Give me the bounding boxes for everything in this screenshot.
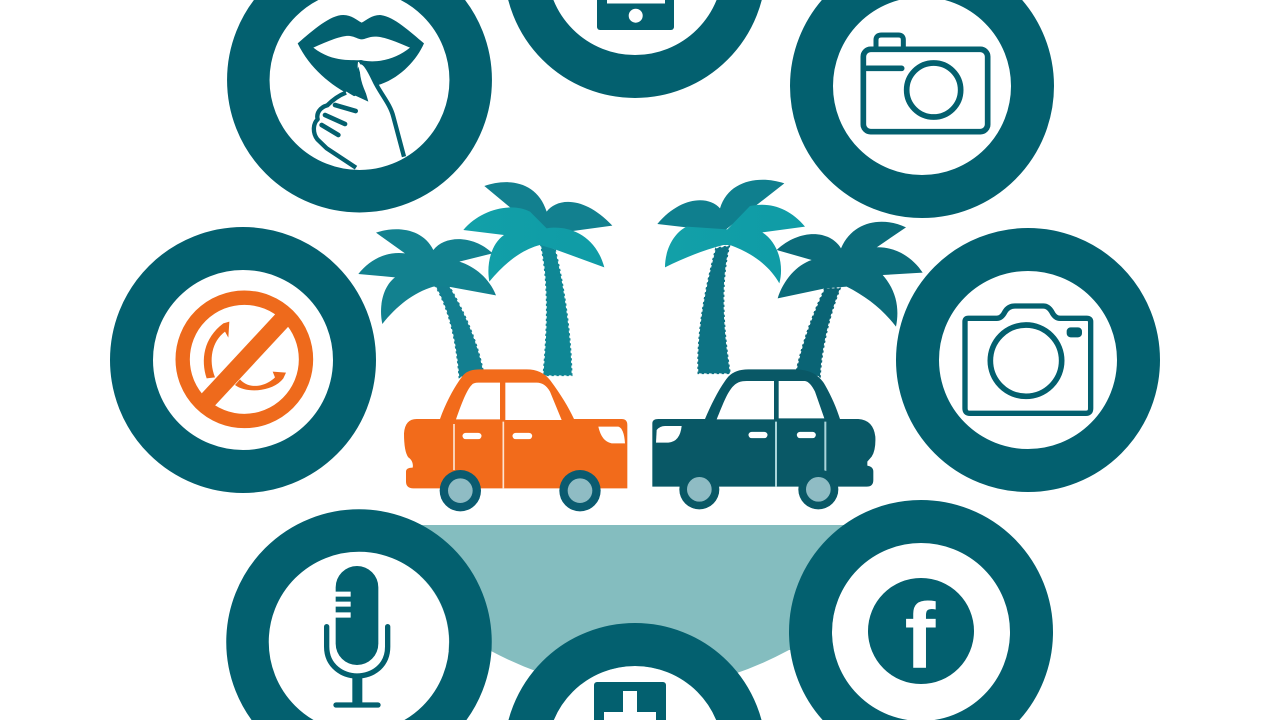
icon: microphone	[327, 566, 388, 708]
tall palm lower fronds	[463, 207, 604, 282]
tall palm trunk	[541, 244, 572, 375]
badge: digital camera	[918, 250, 1138, 470]
badge: medical kit	[526, 644, 744, 720]
palm pair: left	[358, 182, 612, 377]
wheels	[440, 470, 601, 511]
palm pair: right	[657, 180, 923, 377]
badge: Facebook	[810, 522, 1032, 720]
door lines	[454, 422, 503, 488]
door handles	[466, 426, 529, 445]
teal ground shape	[420, 525, 850, 690]
dark teal car	[652, 369, 875, 509]
windows	[717, 381, 824, 419]
badge: compact camera	[812, 0, 1032, 196]
icon: lips with finger	[298, 15, 424, 172]
icon: compact camera	[863, 35, 988, 132]
left palm crown	[358, 229, 496, 324]
door lines	[776, 422, 825, 487]
icon: medical cross	[594, 682, 666, 720]
icon: Facebook logo	[868, 578, 974, 688]
orange car	[404, 369, 627, 511]
windows	[456, 383, 562, 420]
headlight	[598, 427, 625, 443]
wheels	[679, 469, 838, 509]
tall palm trunk	[698, 246, 730, 373]
right palm crown	[777, 222, 923, 327]
left palm trunk	[435, 285, 483, 377]
icon: digital camera	[965, 306, 1091, 413]
right palm trunk	[797, 288, 840, 377]
tall palm upper fronds	[484, 182, 612, 235]
tall palm lower fronds	[665, 205, 805, 283]
icon: crossed-out phone	[183, 298, 306, 421]
badge: no phone calls	[132, 248, 354, 472]
icon: Facebook logo: f	[905, 584, 937, 688]
headlight	[656, 426, 682, 443]
badge: silence, lips and finger	[248, 0, 471, 191]
car body	[652, 369, 875, 487]
badge: microphone	[248, 530, 470, 720]
car body	[404, 369, 627, 488]
door handles	[752, 425, 813, 444]
tall palm upper fronds	[657, 180, 784, 232]
badge: tablet	[526, 0, 744, 76]
icon: tablet	[597, 0, 674, 30]
